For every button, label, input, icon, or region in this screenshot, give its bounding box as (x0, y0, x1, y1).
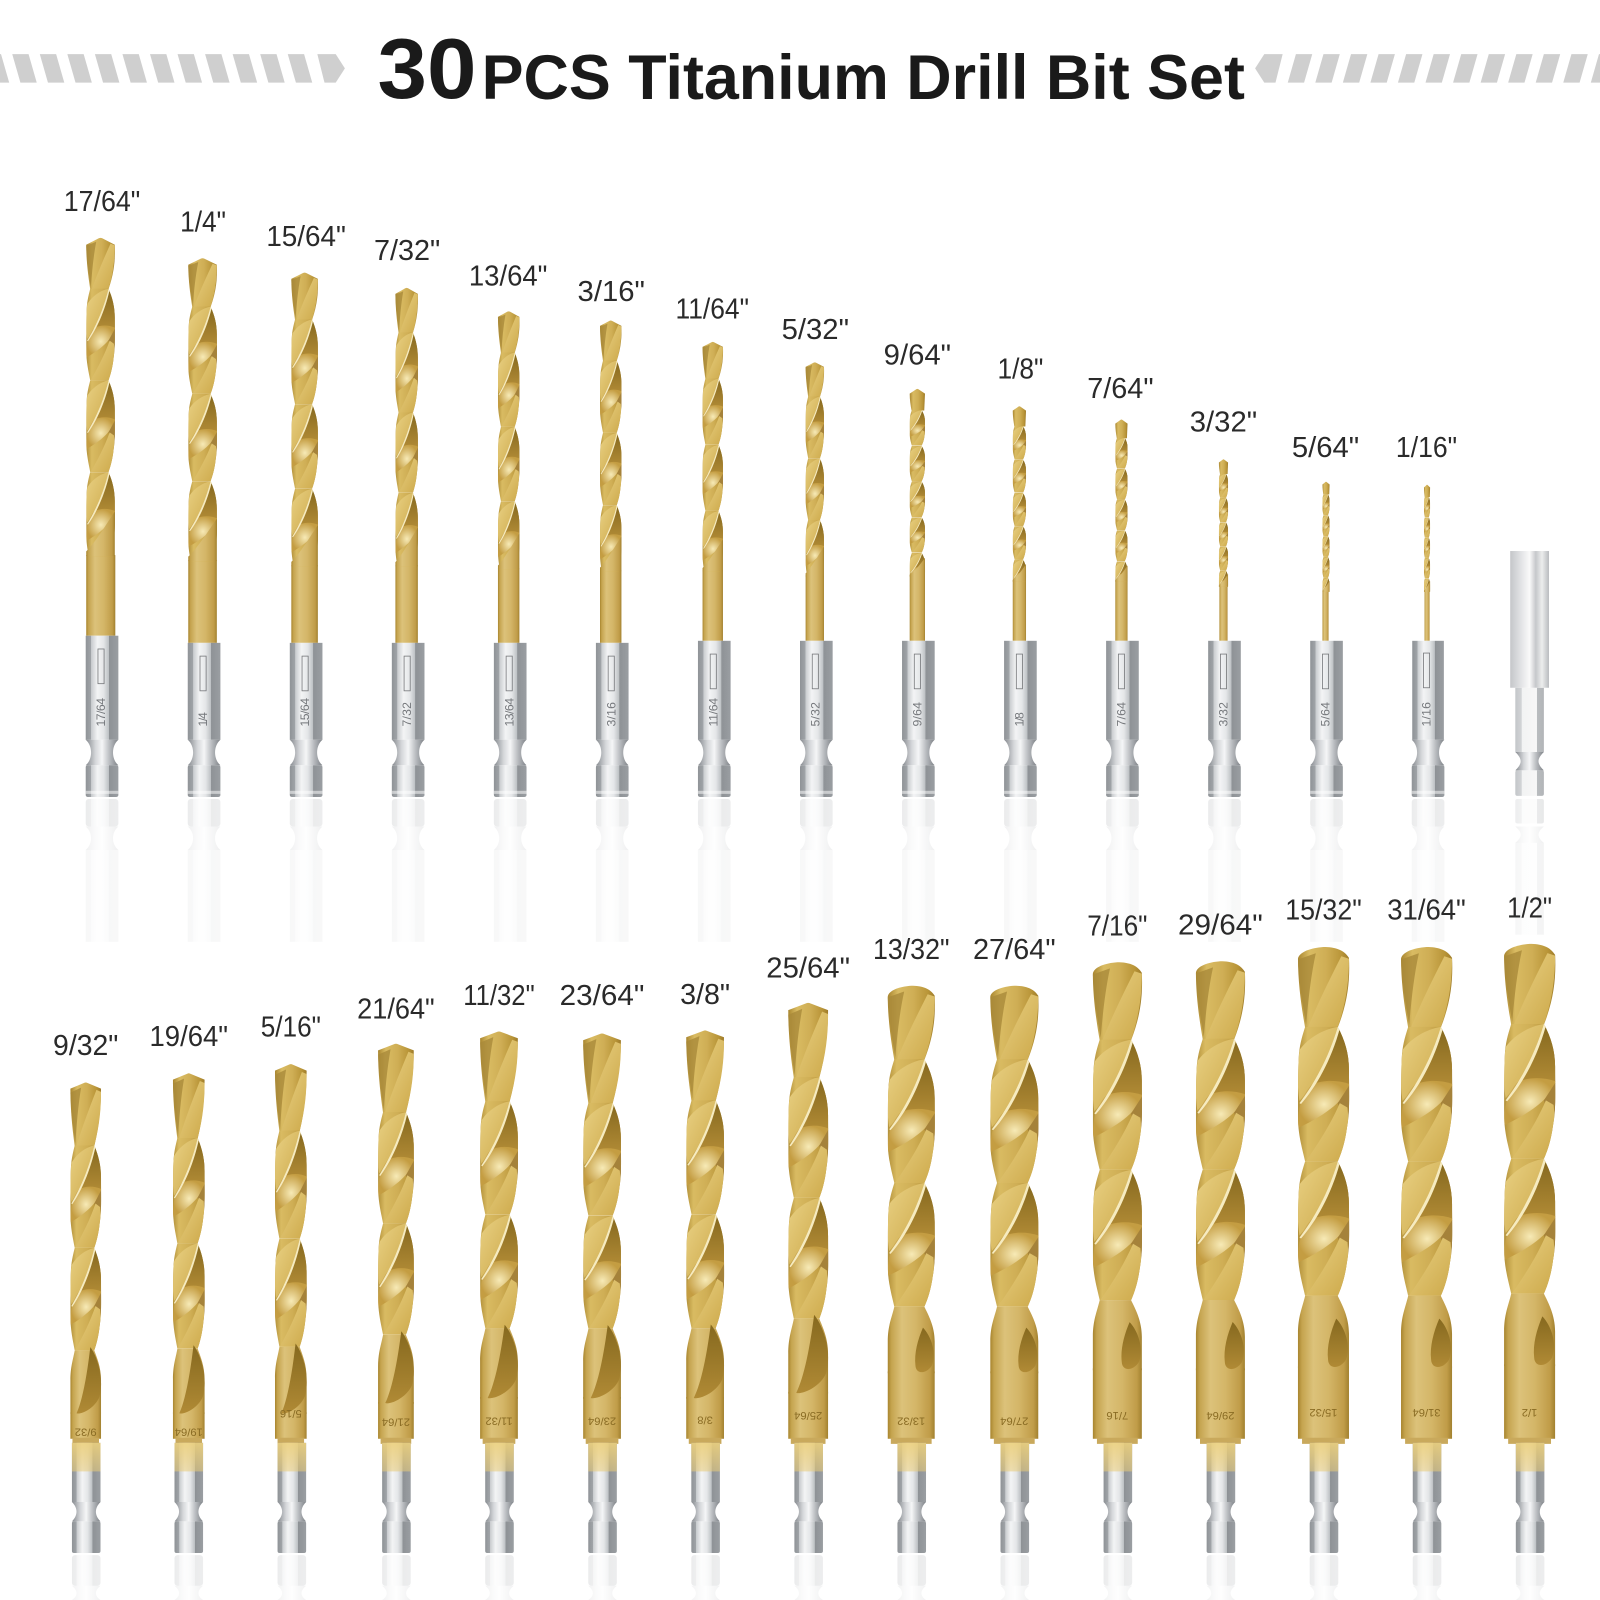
drill bit: 11/32: 11/32 (485, 1414, 513, 1426)
drill bit: 1/4: 1/4 (196, 712, 210, 727)
drill bit: 15/32: 15/32" (1285, 894, 1362, 926)
drill bit: 23/64 (560, 980, 644, 1600)
drill bit: 7/32: 7/32 (400, 702, 414, 727)
drill bit: 15/64: 15/64 (298, 698, 312, 727)
drill bit: 21/64: 21/64 (382, 1415, 410, 1427)
drill bit: 29/64 (1178, 910, 1263, 1600)
drill bit: 3/32: 3/32 (1217, 702, 1231, 727)
drill bit: 15/32 (1285, 894, 1362, 1600)
drill bit: 21/64 (357, 993, 435, 1600)
drill bit: 5/32: 5/32 (808, 702, 822, 727)
drill bit: 21/64: 21/64" (357, 993, 435, 1025)
drill bit: 13/32: 13/32" (873, 934, 949, 966)
drill bit: 19/64: 19/64" (149, 1021, 228, 1053)
drill bit: 1/8 (997, 354, 1043, 942)
drill bit: 5/64: 5/64" (1292, 432, 1359, 464)
drill bit: 5/16 (261, 1012, 321, 1600)
drill bit: 1/8: 1/8" (997, 354, 1043, 386)
drill bit: 3/32: 3/32" (1190, 407, 1257, 439)
drill bit: 11/64: 11/64 (706, 698, 720, 727)
drill bit: 5/16: 5/16 (280, 1407, 302, 1419)
drill bit: 1/16: 1/16 (1420, 702, 1434, 727)
drill bit: 27/64: 27/64" (973, 934, 1056, 966)
drill bit: 1/2 (1502, 892, 1558, 1600)
drill bit: 9/32 (53, 1030, 118, 1600)
drill bit: 15/64: 15/64" (266, 221, 346, 253)
drill bit: 1/16: 1/16" (1396, 432, 1457, 464)
drill bit: 5/16: 5/16" (261, 1012, 321, 1044)
drill bit: 1/4: 1/4" (180, 207, 226, 239)
drill bit: 1/16 (1396, 432, 1457, 942)
drill bit: 13/32: 13/32 (897, 1414, 925, 1426)
drill bit: 11/32 (463, 980, 535, 1600)
drill bit: 17/64: 17/64" (64, 186, 140, 218)
drill bit: 3/8 (680, 979, 730, 1600)
drill bit: 7/64: 7/64 (1115, 702, 1129, 727)
title: PCS Titanium Drill Bit Set (482, 43, 1245, 113)
drill bit: 15/64 (266, 221, 346, 942)
drill bit: 7/32: 7/32" (374, 235, 440, 267)
drill bit: 31/64: 31/64 (1412, 1406, 1441, 1418)
drill bit: 19/64 (149, 1021, 228, 1600)
drill bit: 3/16: 3/16 (604, 702, 618, 727)
drill bit: 7/16 (1087, 911, 1147, 1600)
drill bit: 5/32 (782, 314, 849, 942)
drill bit: 9/32: 9/32 (75, 1426, 97, 1438)
drill bit: 1/2: 1/2 (1522, 1406, 1537, 1418)
drill bit: 15/32: 15/32 (1309, 1406, 1338, 1418)
drill bit: 1/4 (180, 207, 226, 942)
title: 30 (378, 21, 477, 117)
drill bit: 7/32 (374, 235, 440, 942)
drill bit: 9/64: 9/64 (910, 702, 924, 727)
drill bit: 3/16: 3/16" (578, 276, 645, 308)
drill bit: 29/64: 29/64" (1178, 910, 1263, 942)
drill bit: 25/64: 25/64" (766, 953, 850, 985)
drill bit: 9/32: 9/32" (53, 1030, 118, 1062)
drill bit: 11/64: 11/64" (676, 293, 749, 325)
drill bit: 7/64 (1087, 373, 1154, 942)
drill bit: 3/16 (578, 276, 645, 942)
drill bit: 3/8: 3/8" (680, 979, 730, 1011)
drill bit: 27/64: 27/64 (1000, 1414, 1028, 1426)
drill bit: 11/64 (676, 293, 749, 942)
drill bit: 29/64: 29/64 (1206, 1409, 1234, 1421)
drill bit: 3/32 (1190, 407, 1257, 942)
drill bit: 25/64: 25/64 (794, 1409, 822, 1421)
bit holder (1510, 551, 1549, 935)
drill bit: 13/64: 13/64" (469, 261, 547, 293)
drill bit: 19/64: 19/64 (175, 1426, 203, 1438)
arrow: right striped banner (1255, 54, 1600, 83)
drill bit: 1/8: 1/8 (1012, 712, 1026, 727)
drill bit: 9/64 (884, 339, 951, 942)
drill bit: 7/16: 7/16" (1087, 911, 1147, 943)
drill bit: 9/64: 9/64" (884, 339, 951, 371)
drill bit: 23/64: 23/64 (588, 1414, 616, 1426)
drill bit: 1/2: 1/2" (1507, 892, 1552, 924)
drill bit: 13/32 (873, 934, 949, 1600)
title (378, 21, 1245, 117)
drill bit: 7/16: 7/16 (1106, 1409, 1128, 1421)
drill bit: 17/64: 17/64 (94, 698, 108, 727)
drill bit: 5/32: 5/32" (782, 314, 849, 346)
drill bit: 11/32: 11/32" (463, 980, 535, 1012)
drill bit: 31/64 (1387, 894, 1466, 1600)
drill bit: 3/8: 3/8 (697, 1413, 713, 1425)
drill bit: 5/64 (1292, 432, 1359, 942)
drill bit: 5/64: 5/64 (1319, 702, 1333, 727)
drill bit: 23/64: 23/64" (560, 980, 644, 1012)
drill bit: 25/64 (766, 953, 850, 1600)
drill bit: 13/64: 13/64 (502, 698, 516, 727)
drill bit: 31/64: 31/64" (1387, 894, 1466, 926)
drill bit: 27/64 (973, 934, 1056, 1600)
drill bit: 17/64 (64, 186, 140, 942)
drill bit: 7/64: 7/64" (1087, 373, 1154, 405)
drill bit: 13/64 (469, 261, 547, 942)
arrow: left striped banner (0, 54, 345, 83)
